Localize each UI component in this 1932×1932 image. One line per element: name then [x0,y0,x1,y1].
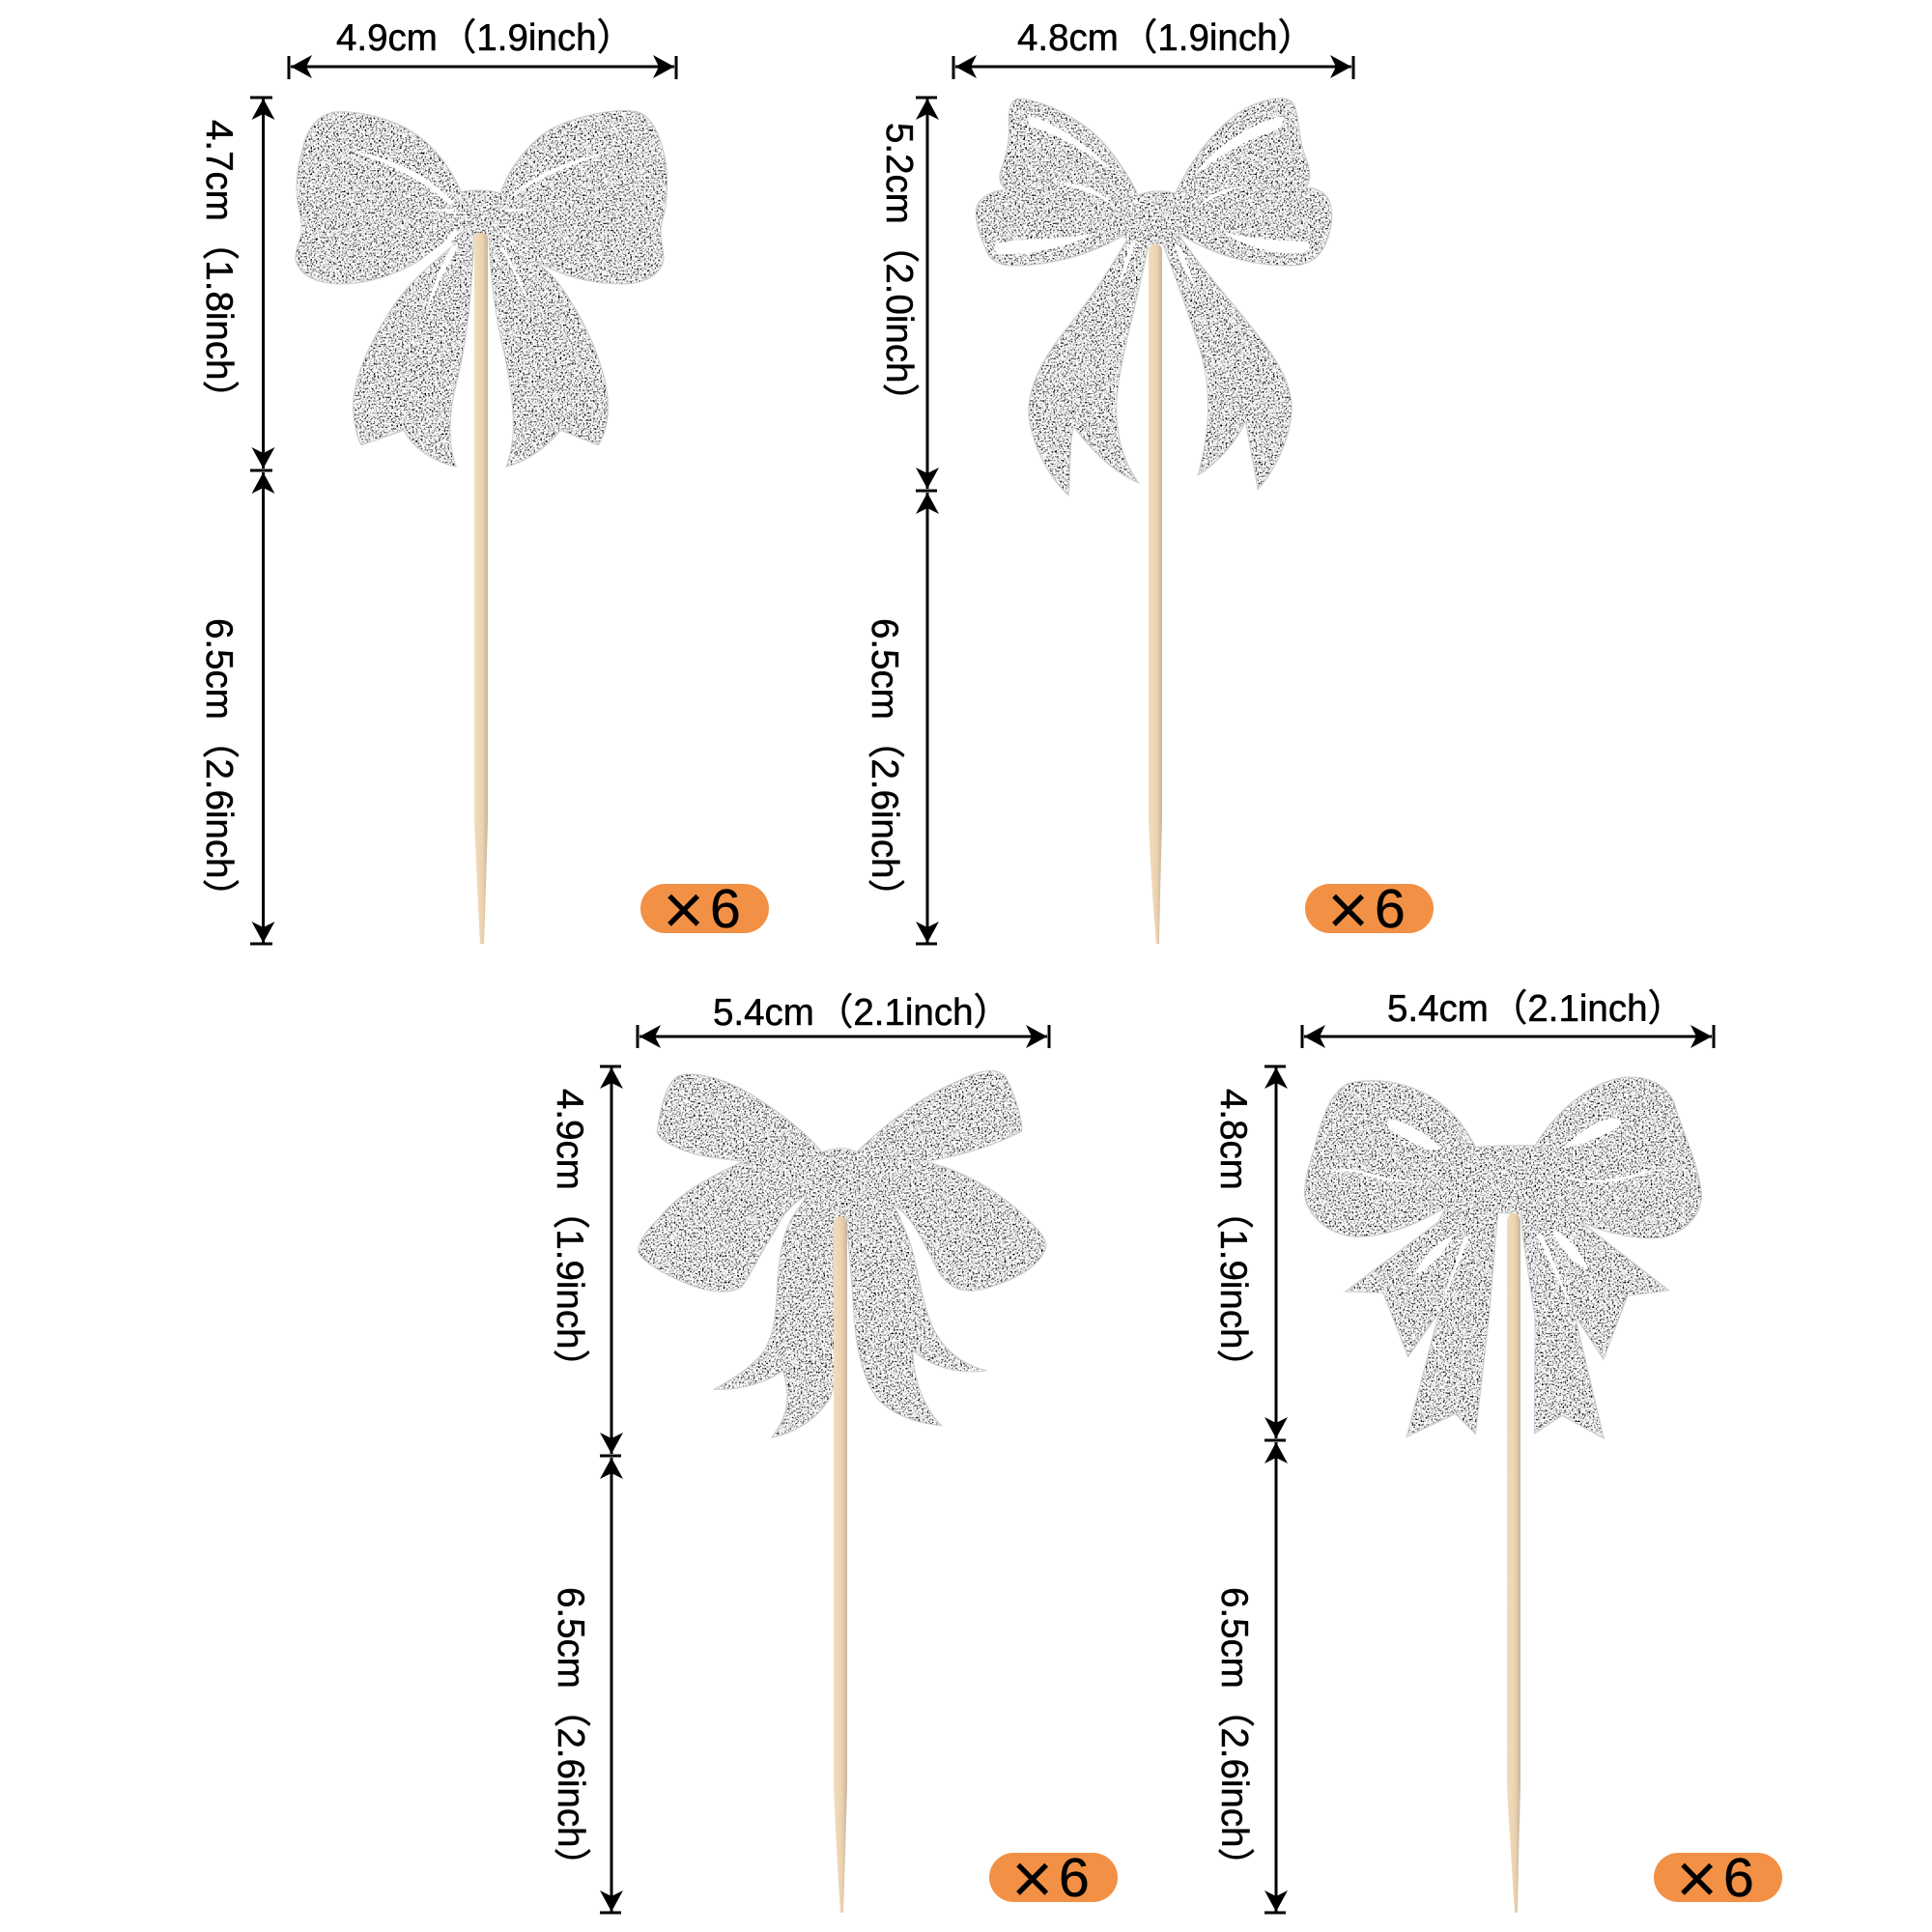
stick length arrow 3 [600,1458,621,1913]
quantity badge 4: 6 [1723,1847,1754,1909]
height arrow 4 [1264,1066,1286,1440]
topper 3: bow with angled wings [638,1070,1046,1913]
quantity badge 1 [640,869,769,950]
quantity badge 4 [1654,1838,1782,1918]
bow 4 glitter shape [1304,1076,1702,1439]
stick length arrow 1 [250,472,272,944]
toothpick 4 [1507,1213,1520,1913]
width label 2: 4.8cm（1.9inch） [1017,17,1315,59]
dimensions: topper 1 [198,17,676,944]
quantity badge 2 [1305,869,1434,950]
dimensions: topper 2 [864,17,1353,944]
bow 1 cut-out details [347,148,623,316]
topper 2: bow with slotted wings [976,98,1332,944]
quantity badge 3: 6 [1059,1847,1090,1909]
toothpick 2 [1149,244,1162,944]
bow 3 glitter shape [638,1070,1046,1438]
toothpick 1 [474,233,488,944]
topper 1: bow with round wings [295,110,668,944]
stick length label 3: 6.5cm （2.6inch） [550,1587,591,1885]
bow 1 glitter shape [295,110,668,468]
stick length label 1: 6.5cm （2.6inch） [198,618,240,916]
width arrow 1 [289,56,676,79]
stick length label 4: 6.5cm （2.6inch） [1213,1587,1255,1885]
height label 3: 4.9cm （1.9inch） [549,1089,590,1386]
quantity badge 1: × [663,869,704,950]
width label 3: 5.4cm（2.1inch） [713,992,1010,1034]
dimensions: topper 3 [549,992,1049,1913]
height arrow 1 [250,98,272,470]
width arrow 4 [1302,1025,1714,1048]
toothpick 3 [834,1216,847,1913]
stick length arrow 2 [916,493,937,944]
width arrow 2 [953,56,1353,79]
dimensions: topper 4 [1212,988,1714,1913]
stick length label 2: 6.5cm （2.6inch） [864,618,905,916]
stick length arrow 4 [1264,1442,1286,1913]
bow 2 cut-out details [995,117,1310,288]
height arrow 3 [600,1066,621,1456]
quantity badge 3: × [1011,1838,1053,1918]
height label 1: 4.7cm （1.8inch） [198,120,240,417]
width arrow 3 [638,1025,1049,1048]
quantity badge 1: 6 [710,878,741,940]
quantity badge 4: × [1676,1838,1718,1918]
height label 4: 4.8cm （1.9inch） [1212,1089,1254,1386]
quantity badge 2: × [1327,869,1369,950]
height arrow 2 [916,98,937,491]
quantity badge 2: 6 [1375,878,1406,940]
height label 2: 5.2cm （2.0inch） [878,123,920,420]
bow 2 glitter shape [976,98,1332,497]
width label 1: 4.9cm（1.9inch） [336,17,634,59]
quantity badge 3 [989,1838,1118,1918]
bow 4 cut-out details [1327,1119,1681,1318]
width label 4: 5.4cm（2.1inch） [1387,988,1685,1030]
topper 4: bow with pointed tails [1304,1076,1702,1913]
